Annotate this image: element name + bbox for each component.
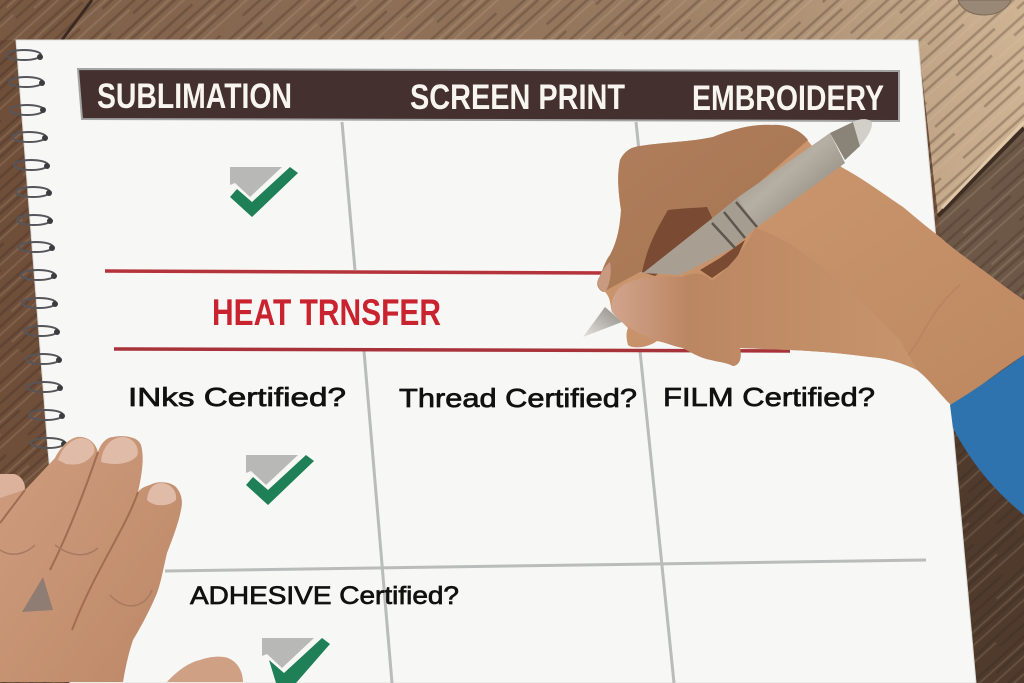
left hand — [0, 436, 243, 682]
finger creases — [0, 452, 138, 630]
writing hand — [597, 125, 1024, 407]
pen barrel — [643, 119, 872, 275]
fingernail — [598, 262, 611, 292]
tattoo — [22, 577, 53, 612]
label: thread certified: Thread Certified? — [399, 383, 637, 413]
red rule bottom — [114, 349, 790, 351]
blue sleeve — [950, 355, 1024, 515]
shadow by pen grip — [700, 240, 745, 278]
heading: heat transfer: HEAT TRNSFER — [212, 292, 441, 333]
thumb and lower hand overlay — [612, 228, 960, 370]
checkmark top — [230, 167, 298, 217]
table grid lines — [165, 122, 926, 683]
checkmark bottom — [262, 638, 330, 683]
shadow under fingers — [642, 207, 716, 276]
red rule top — [105, 271, 610, 273]
hand silhouette with fingers — [598, 125, 1024, 407]
header band — [78, 69, 899, 121]
spiral binding — [7, 50, 67, 448]
thumb of left hand — [167, 657, 243, 682]
label: film certified: FILM Certified? — [663, 382, 875, 412]
header: sublimation: SUBLIMATION — [97, 77, 292, 116]
curled fingers — [597, 125, 808, 292]
header: embroidery: EMBROIDERY — [692, 79, 884, 118]
label: inks certified: INks Certified? — [128, 382, 346, 412]
label: adhesive certified: ADHESIVE Certified? — [190, 582, 459, 610]
header: screen print: SCREEN PRINT — [410, 78, 625, 117]
pen nib — [583, 307, 622, 337]
checkmark middle — [246, 455, 314, 505]
fingernails — [58, 438, 94, 465]
